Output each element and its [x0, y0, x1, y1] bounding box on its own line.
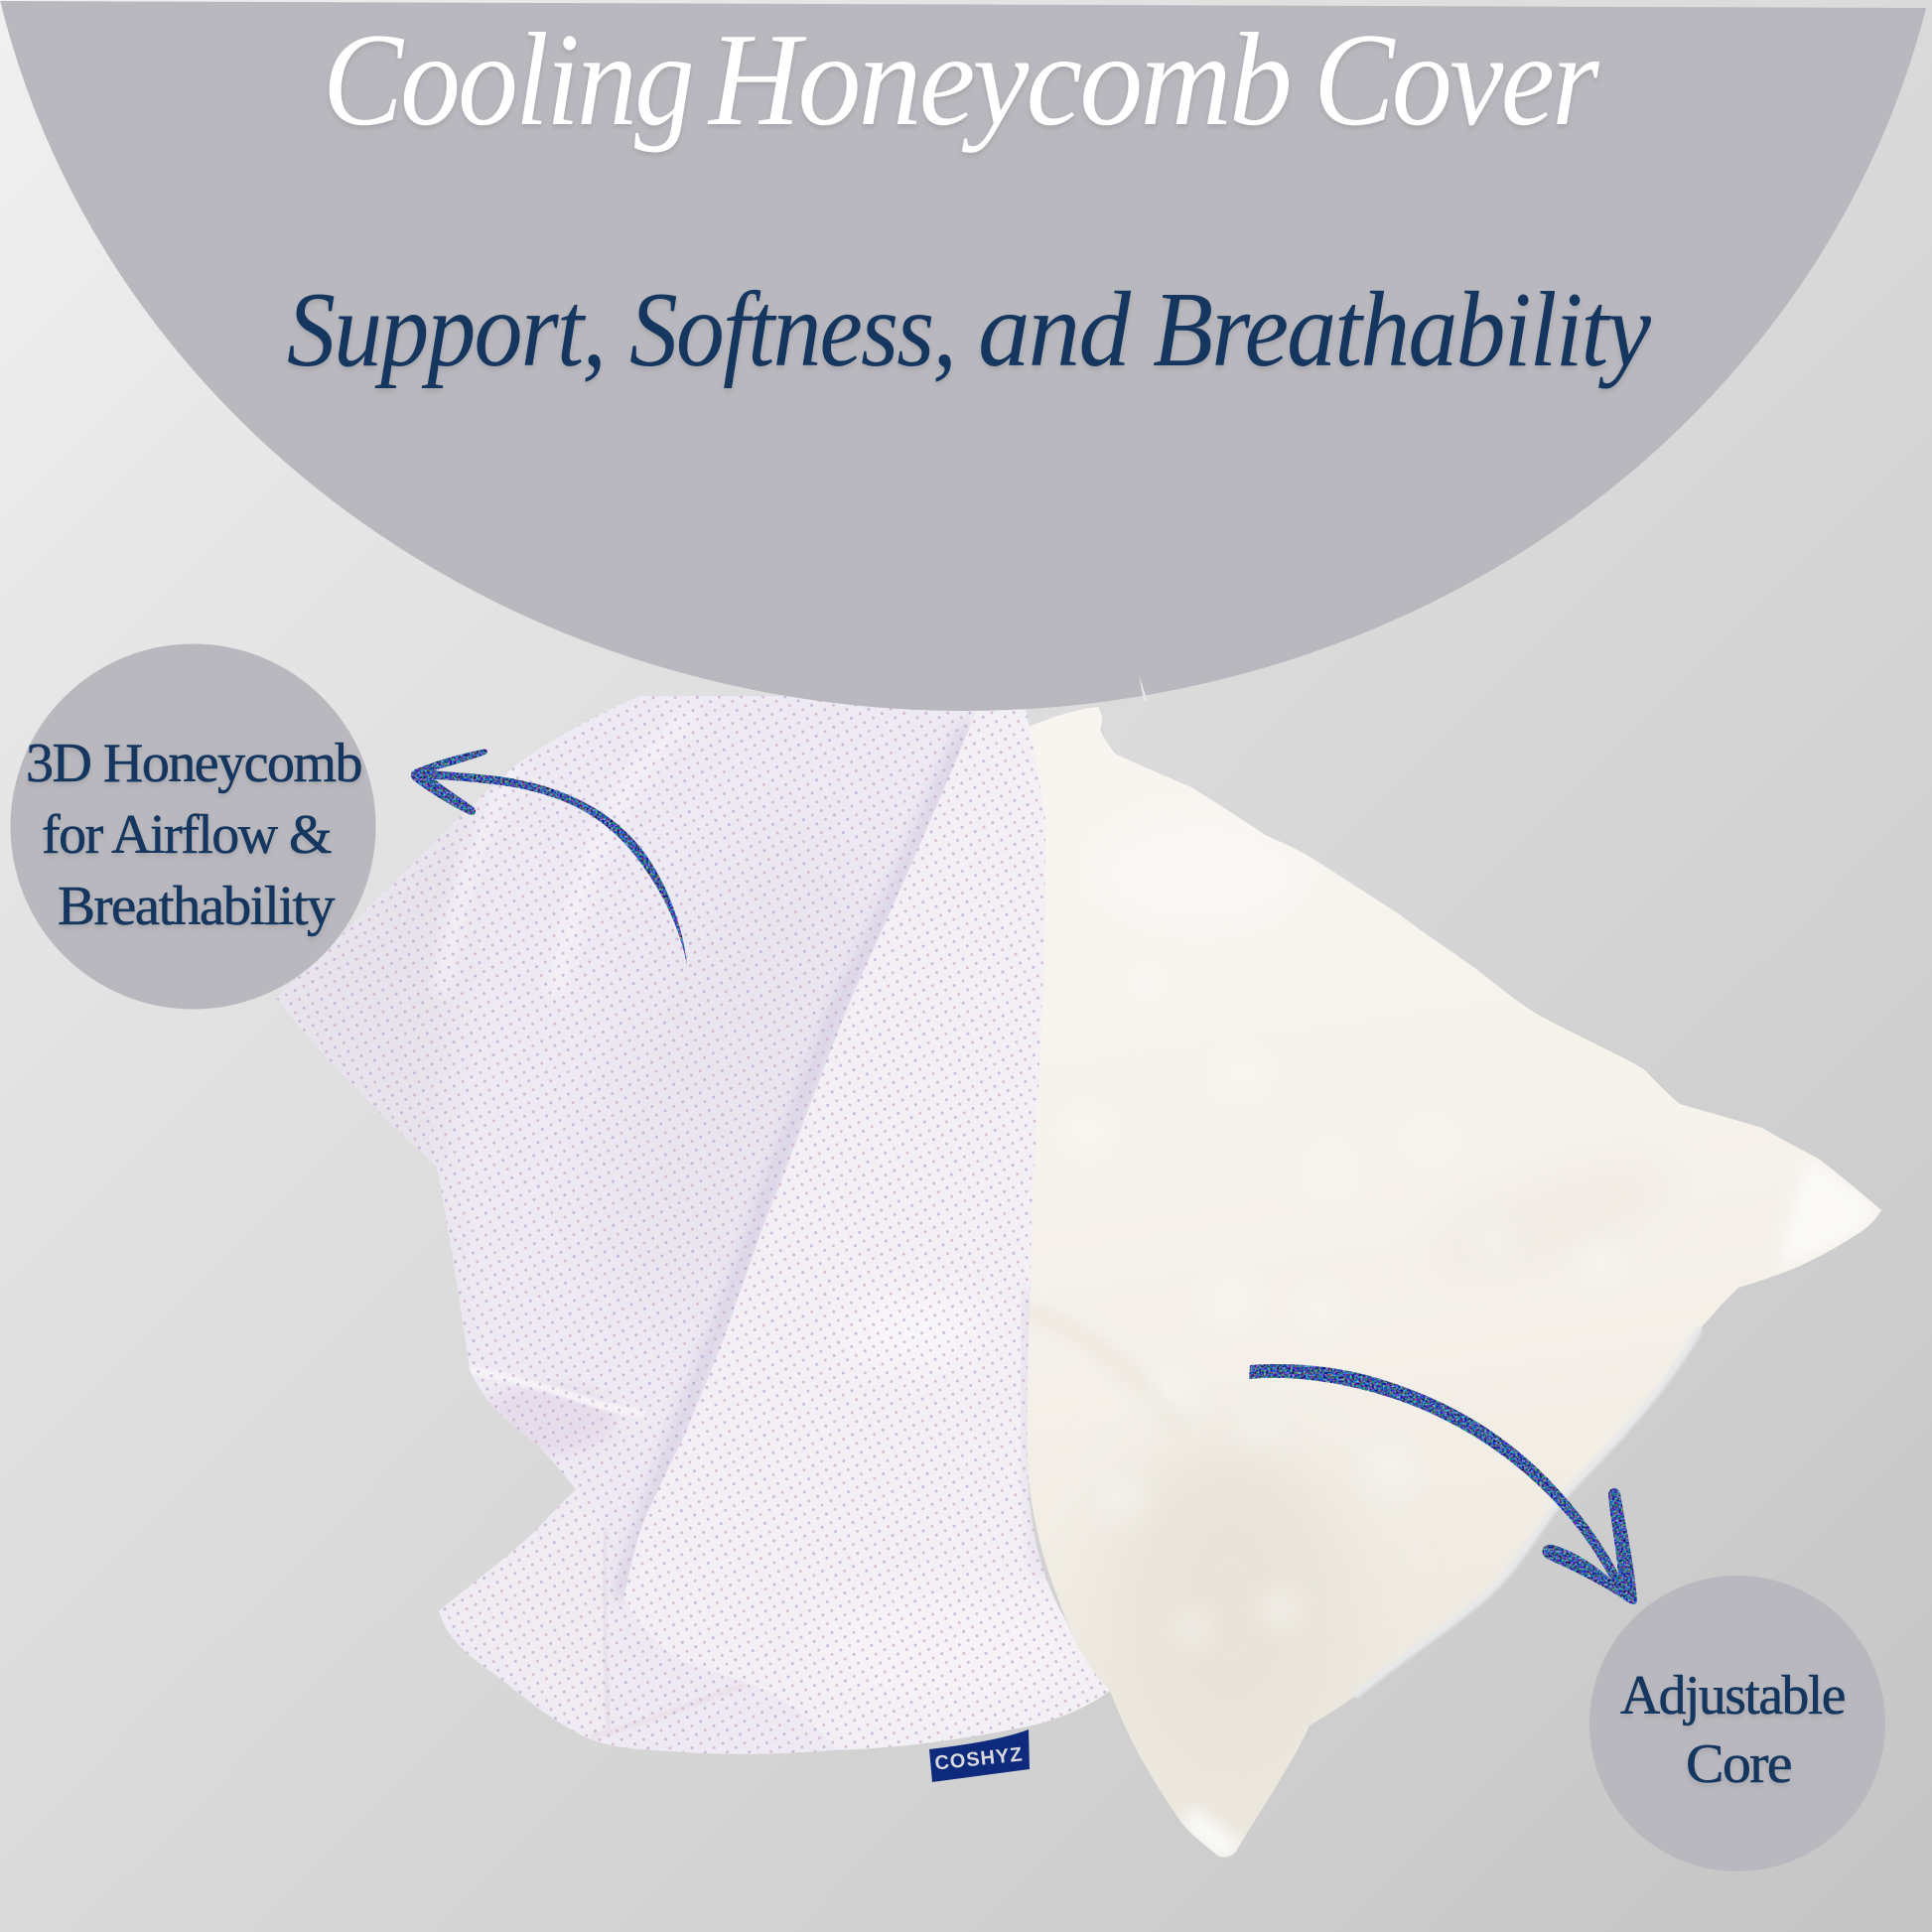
- brand tag: COSHYZ: [933, 1743, 1025, 1775]
- callout text left: [26, 733, 361, 937]
- callout text left: for Airflow &: [42, 804, 332, 866]
- title: Cover: [1313, 6, 1600, 153]
- honeycomb cover: [258, 685, 1132, 1767]
- arrow: to core callout: [1249, 1364, 1637, 1604]
- top semicircle panel: [0, 0, 1932, 711]
- pillow zipper edge: [1356, 1330, 1699, 1695]
- callout text right: Adjustable: [1620, 1665, 1845, 1726]
- pillow core: cream adjustable fill: [993, 675, 1906, 1866]
- small fabric sliver: [1139, 675, 1148, 701]
- brand tag: [929, 1729, 1030, 1782]
- callout: 3D honeycomb: [10, 643, 375, 1009]
- callout circle left: [10, 643, 375, 1009]
- callout text left: 3D Honeycomb: [26, 733, 361, 794]
- cover: lighter overlapping flap: [618, 725, 968, 1598]
- callout text left: Breathability: [58, 876, 336, 937]
- title: [323, 6, 1600, 153]
- subtitle: Softness,: [629, 271, 955, 389]
- subtitle: Breathability: [1153, 271, 1651, 389]
- subtitle: [287, 271, 1651, 389]
- callout text right: [1620, 1665, 1845, 1795]
- callout text right: Core: [1686, 1733, 1791, 1795]
- callout circle right: [1589, 1576, 1885, 1871]
- title: Honeycomb: [707, 6, 1290, 153]
- pillow photo: [258, 675, 1906, 1866]
- title: Cooling: [323, 6, 692, 153]
- subtitle: Support,: [287, 271, 605, 389]
- subtitle: and: [978, 271, 1132, 389]
- arrow: to honeycomb callout: [411, 749, 687, 965]
- callout: adjustable core: [1589, 1576, 1885, 1871]
